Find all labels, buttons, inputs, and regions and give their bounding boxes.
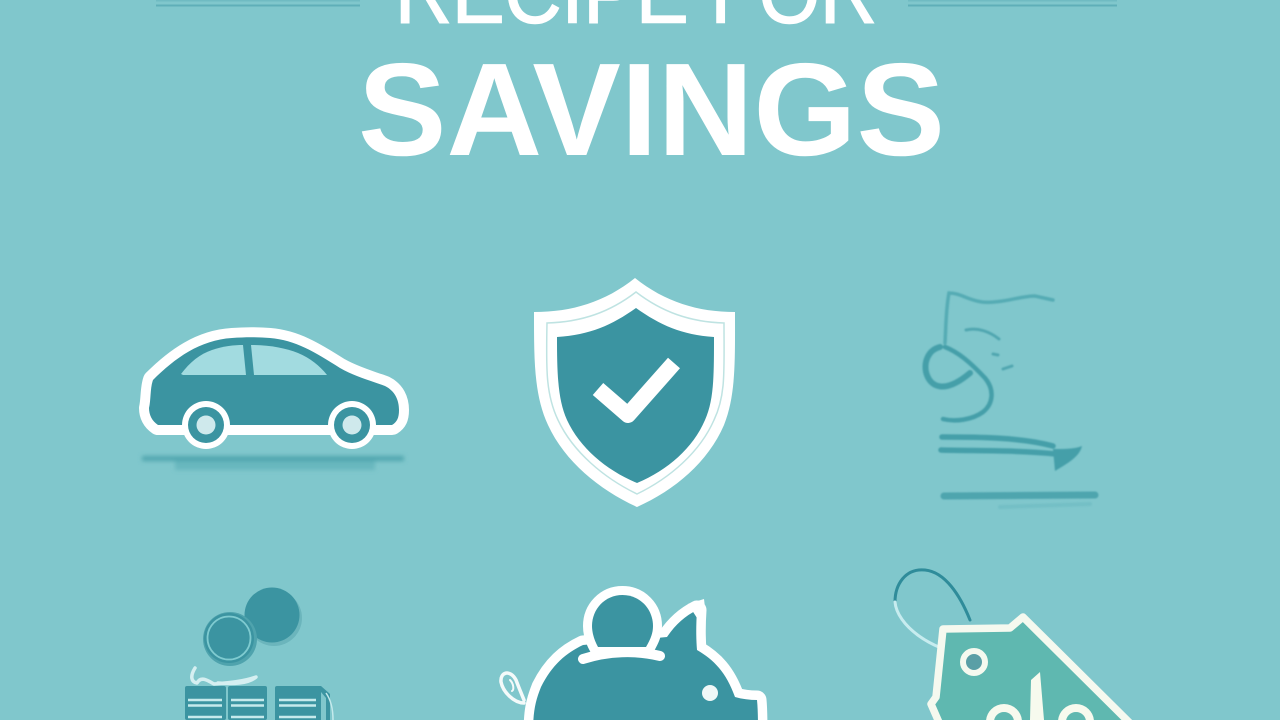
car rear wheel <box>182 401 230 449</box>
bill stack 1 <box>185 686 226 720</box>
car front wheel <box>328 401 376 449</box>
sketch base shadow <box>1000 504 1090 507</box>
icon: discount tag <box>895 570 1150 720</box>
small coin <box>203 612 257 666</box>
sketch base <box>944 495 1095 496</box>
sketch page corner <box>1053 446 1082 471</box>
sketch eyebrow and marks <box>966 329 1012 369</box>
sketch swirl tail <box>943 347 992 420</box>
icon: shield with check <box>534 278 735 507</box>
pig slot <box>583 652 660 659</box>
check mark <box>598 363 674 415</box>
title: savings: SAVINGS <box>358 36 945 183</box>
header rule left <box>156 0 360 6</box>
bill stack 3 <box>275 686 333 720</box>
tag hole <box>963 651 985 673</box>
paper scribble <box>192 668 256 684</box>
icon: car <box>142 337 404 470</box>
pig body <box>533 610 758 720</box>
icon: piggy bank <box>501 595 758 720</box>
shield core <box>557 308 714 483</box>
shield outer <box>534 278 735 507</box>
header rule right <box>908 0 1117 6</box>
shield inner line <box>547 292 724 494</box>
bill stack 2 <box>228 686 267 720</box>
tag body <box>931 617 1150 720</box>
tag string <box>895 570 970 655</box>
car shadow <box>142 456 404 470</box>
sketch book spine <box>941 437 1056 454</box>
pig ear tip <box>688 599 706 618</box>
icon: faded book sketch <box>926 293 1095 507</box>
sketch page outline <box>945 293 1053 343</box>
percent slash <box>1030 672 1044 720</box>
percent circles <box>990 708 1090 720</box>
car body <box>149 337 399 425</box>
sketch swirl crescent <box>926 347 970 386</box>
coin in slot <box>592 595 653 647</box>
percent sign <box>990 672 1090 720</box>
car rear window <box>181 345 246 375</box>
large coin <box>244 588 302 646</box>
pig eye <box>702 685 718 701</box>
pig tail <box>501 673 524 703</box>
car front window <box>251 345 327 375</box>
icon: coins and bills <box>185 588 333 720</box>
